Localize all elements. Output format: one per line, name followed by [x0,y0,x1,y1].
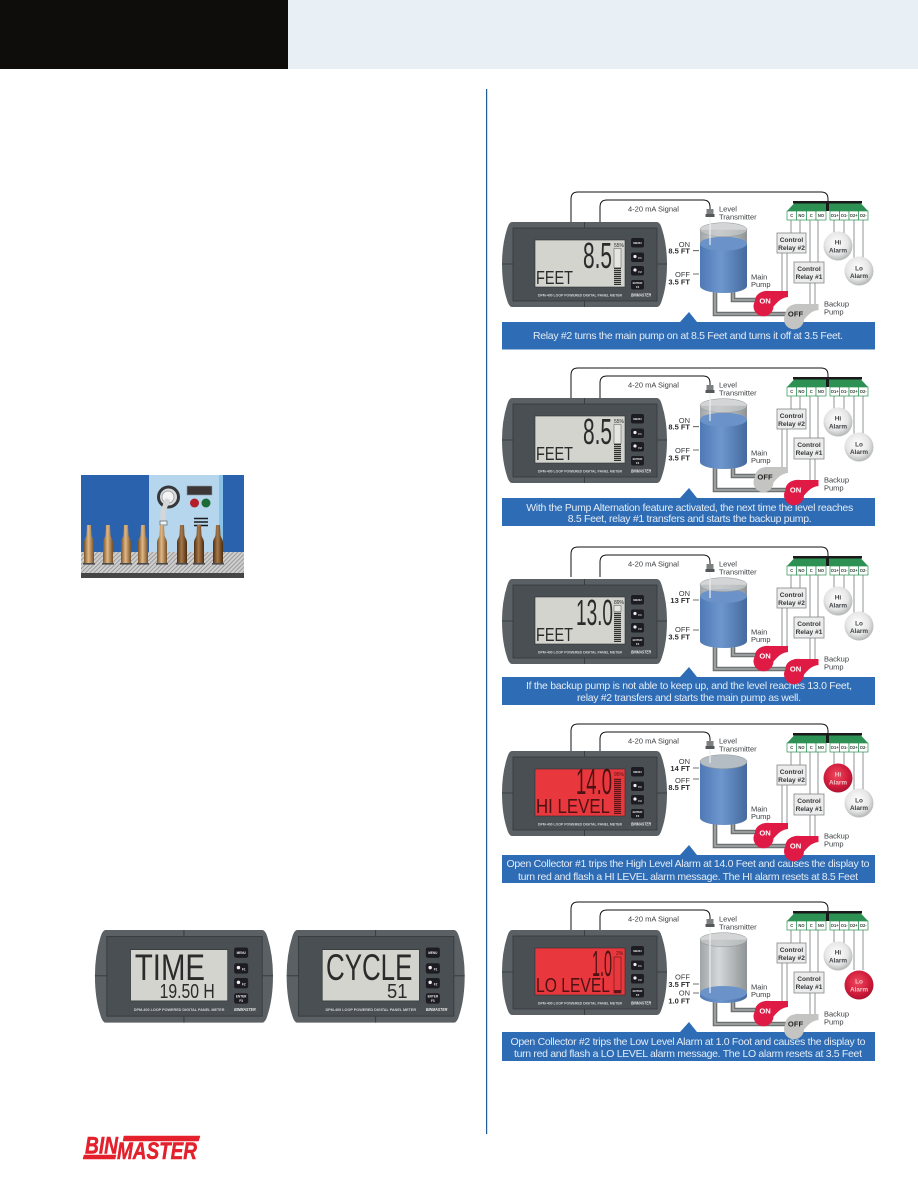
relay and terminal labels: C [790,923,793,928]
panel: low level alarm [502,902,875,1061]
signal and instrument labels: Level [719,560,737,568]
tank with water level [700,741,747,825]
relay and terminal labels: C [810,213,813,218]
relay and terminal labels: Relay #2 [778,421,805,428]
relay and terminal labels [778,213,867,281]
meter: 8.5 FEET: 55% [614,419,625,425]
meter: 14.0 HI LEVEL: MENU [633,770,642,774]
meter: TIME 1950 H display: MENU [237,951,246,955]
relay and terminal labels: O2+ [850,745,858,750]
signal and instrument labels [628,914,849,1026]
pump: backup off: OFF [788,1020,803,1029]
pump: main on [754,646,788,671]
lo alarm: Alarm [850,628,868,635]
caption banner: With the Pump Alternation feature activated, the next time the level reaches [526,502,853,514]
meter: TIME 1950 H display: DPM-400 LOOP POWERED DIGITAL PANEL METER [134,1008,225,1012]
level set points: 3.5 FT [668,980,690,989]
caption banner: Relay #2 turns the main pump on at 8.5 Feet and turns it off at 3.5 Feet. [533,330,843,342]
meter: 14.0 HI LEVEL: 95% [614,772,625,778]
relay and terminal labels: Control [797,621,821,628]
header: black title block [0,0,288,69]
meter: 1.0 LO LEVEL [502,930,667,1015]
relay and terminal labels: Control [780,237,803,244]
signal and instrument labels: Main [751,272,767,282]
lo alarm: Alarm [850,273,868,280]
level set points: ON [679,416,690,425]
signal and instrument labels: 4-20 mA Signal [628,380,679,390]
signal and instrument labels: Level [719,914,737,924]
signal and instrument labels: Pump [751,812,771,821]
pump: backup off [784,304,818,329]
level set points: OFF [675,446,690,455]
panel: backup cannot keep up [502,547,875,705]
hi alarm: Alarm [829,958,847,964]
meter: 13.0 FEET [502,579,667,664]
meter: TIME 1950 H display: TIME [135,947,205,988]
signal and instrument labels: Transmitter [719,922,757,932]
meter: 8.5 FEET: MENU [633,241,642,245]
relay and terminal labels: Relay #2 [778,777,805,784]
relay and terminal labels: Control [780,413,803,420]
meter: 13.0 FEET: MENU [633,598,642,602]
relay and terminal labels: Relay #2 [778,245,805,252]
meter: 1.0 LO LEVEL: 1.0 [592,943,612,984]
hi alarm [824,408,852,436]
signal and instrument labels: Main [751,448,767,458]
level set points [668,416,699,462]
meter: 8.5 FEET: MENU [633,417,642,421]
column divider line [486,89,487,1134]
relay and terminal labels: NO [798,923,805,928]
meter: 8.5 FEET: F3 [636,461,640,465]
meter: 13.0 FEET: F2 [638,627,642,631]
level set points: OFF [675,972,690,982]
meter: 14.0 HI LEVEL [502,751,667,836]
meter: 1.0 LO LEVEL: 2% [616,951,624,957]
meter: 1.0 LO LEVEL: DPM-400 LOOP POWERED DIGITAL PANEL METER [538,1001,623,1005]
signal and instrument labels: Transmitter [719,568,757,576]
relay and terminal labels [778,745,867,813]
relay and terminal labels: O1- [841,213,848,218]
panel: relay 2 main pump [502,192,875,350]
pump: backup on: ON [790,842,801,851]
relay and terminal labels: O1+ [831,389,839,394]
level set points: 3.5 FT [668,632,690,642]
relay and terminal labels: O2- [860,745,867,750]
relay and terminal labels: C [790,389,793,394]
hi alarm active: Alarm [829,780,847,786]
meter: 8.5 FEET [502,222,667,307]
meter: 13.0 FEET: 13.0 [576,592,613,633]
tank with water level [700,209,747,293]
pump: backup on [784,836,818,861]
pump: main off [754,467,788,492]
meter: 8.5 FEET: DPM-400 LOOP POWERED DIGITAL PANEL METER [538,293,623,297]
level set points: 8.5 FT [668,783,690,792]
meter: TIME 1950 H display: F3 [239,999,243,1003]
meter: 1.0 LO LEVEL: F2 [638,978,642,982]
signal and instrument labels: Transmitter [719,212,757,222]
signal and instrument labels [628,380,849,492]
signal and instrument labels: Main [751,804,767,814]
level set points: 3.5 FT [668,454,690,462]
signal and instrument labels: Level [719,736,737,746]
relay and terminal labels: O2+ [850,923,858,928]
relay and terminal labels: NO [798,745,805,750]
hi alarm [824,232,852,260]
hi alarm: Hi [835,416,841,422]
hi alarm: Hi [835,950,841,956]
level set points: ON [679,589,690,598]
pump: backup on [784,659,818,684]
lo alarm: Lo [855,266,863,272]
relay and terminal labels: NO [798,389,805,394]
level set points: 13 FT [670,596,690,605]
relay and terminal labels: NO [818,745,825,750]
level set points: ON [679,757,690,766]
signal and instrument labels: Backup [824,654,849,664]
relay and terminal labels: Control [780,592,803,599]
level set points [668,757,699,792]
signal and instrument labels: Pump [751,280,771,289]
pump: main on [754,291,788,316]
caption banner [502,845,875,883]
lo alarm: Lo [855,442,863,448]
meter: 1.0 LO LEVEL: MENU [633,949,642,953]
meter: 14.0 HI LEVEL: HI LEVEL [536,796,610,818]
signal and instrument labels: Main [751,982,767,992]
signal and instrument labels [628,204,849,316]
meter: TIME 1950 H display: F2 [242,983,246,987]
relay and terminal labels: Control [797,442,821,449]
signal and instrument labels: Pump [751,990,771,999]
meter: CYCLE 51 display: F2 [434,983,438,987]
hi alarm [824,942,852,970]
logo: BinMaster: MASTER [117,1138,198,1165]
meter: 8.5 FEET: F1 [638,256,642,260]
signal and instrument labels: Pump [824,662,844,672]
signal and instrument labels: Pump [824,308,844,316]
meter: TIME 1950 H display: BINMASTER [234,1007,256,1013]
meter: CYCLE 51 display: DPM-400 LOOP POWERED DIGITAL PANEL METER [325,1008,416,1012]
relay and terminal labels: C [790,213,793,218]
caption banner: relay #2 transfers and starts the main pump as well. [577,692,801,704]
signal and instrument labels: Backup [824,476,849,484]
lo alarm: Alarm [850,805,868,812]
meter: CYCLE 51 display [287,930,465,1023]
level set points: OFF [675,270,690,279]
meter: 14.0 HI LEVEL: 14.0 [576,761,612,802]
pump: main on: ON [759,829,771,838]
relay and terminal labels: C [790,568,793,573]
panel: high level alarm [502,724,875,883]
lo alarm [844,788,874,818]
pump: backup on [784,480,818,505]
tank with water level [700,385,747,469]
lo alarm active: Alarm [850,986,868,994]
lo alarm active [844,970,874,1000]
relay and terminal labels: O2- [860,568,867,573]
relay and terminal labels: NO [818,213,825,218]
meter: 1.0 LO LEVEL: ENTER [633,989,643,993]
relay and terminal labels [778,389,867,457]
caption banner [502,1022,875,1061]
lo alarm [844,432,874,462]
signal and instrument labels: Pump [824,484,844,492]
hi alarm: Alarm [829,424,847,430]
relay and terminal labels: C [810,745,813,750]
meter: CYCLE 51 display: ENTER [428,995,439,999]
pump: backup on: ON [790,665,801,674]
meter: 14.0 HI LEVEL: DPM-400 LOOP POWERED DIGITAL PANEL METER [538,822,623,826]
pump: backup off [784,1014,818,1039]
relay and terminal labels [778,923,867,991]
meter: 8.5 FEET: BINMASTER [631,292,652,298]
relay and terminal labels: Control [797,798,821,805]
meter: 8.5 FEET: F2 [638,270,642,274]
pump: backup on: ON [790,486,801,495]
relay and terminal labels: O1- [841,923,848,928]
level set points: 8.5 FT [668,246,690,256]
relay and terminal labels: O2- [860,389,867,394]
meter: TIME 1950 H display [95,930,273,1023]
level set points [668,589,699,642]
relay and terminal labels: O1+ [831,923,839,928]
signal and instrument labels: Transmitter [719,388,757,398]
pump: main on: ON [759,1007,771,1016]
meter: 8.5 FEET [502,398,667,483]
relay and terminal labels: Relay #1 [796,629,823,636]
lo alarm [844,256,874,286]
meter: 8.5 FEET: ENTER [633,281,643,285]
caption banner: 8.5 Feet, relay #1 transfers and starts the backup pump. [568,513,812,525]
meter: 8.5 FEET: BINMASTER [631,468,652,474]
signal and instrument labels [628,736,849,848]
relay and terminal labels: NO [818,568,825,573]
relay and terminal labels: O1+ [831,213,839,218]
pump: backup off: OFF [788,310,803,319]
meter: CYCLE 51 display: F3 [431,999,435,1003]
tank with water level [700,564,747,648]
meter: 14.0 HI LEVEL: F1 [638,785,642,789]
meter: 1.0 LO LEVEL: BINMASTER [631,1000,652,1006]
signal and instrument labels: 4-20 mA Signal [628,560,679,568]
meter: CYCLE 51 display: BINMASTER [426,1007,448,1013]
relay and terminal labels: O1+ [831,745,839,750]
hi alarm: Hi [835,240,841,246]
meter: 13.0 FEET: ENTER [633,638,643,642]
relay and terminal labels: O2+ [850,389,858,394]
relay and terminal labels: C [810,389,813,394]
meter: 13.0 FEET: 89% [614,600,625,606]
meter: 13.0 FEET: BINMASTER [631,650,652,654]
relay and terminal labels: O2- [860,923,867,928]
relay and terminal labels: O2+ [850,568,858,573]
signal and instrument labels: Transmitter [719,744,757,754]
panel: pump alternation backup pump [502,368,875,526]
level set points: OFF [675,625,690,634]
logo: BinMaster [83,1132,200,1165]
caption banner: turn red and flash a LO LEVEL alarm message. The LO alarm resets at 3.5 Feet [514,1048,862,1060]
meter: TIME 1950 H display: F1 [242,967,246,971]
illustration: bottling line with level sensor [81,475,244,578]
level set points [668,972,699,1006]
pump: main on: ON [759,297,771,306]
meter: 8.5 FEET: ENTER [633,457,643,461]
caption banner: If the backup pump is not able to keep up, and the level reaches 13.0 Feet, [526,680,852,692]
relay and terminal labels: C [810,568,813,573]
meter: 1.0 LO LEVEL: F3 [636,993,640,997]
meter: CYCLE 51 display: 51 [387,980,407,1003]
meter: TIME 1950 H display: ENTER [236,995,247,999]
relay and terminal labels: C [810,923,813,928]
meter: 14.0 HI LEVEL: BINMASTER [631,822,652,826]
hi alarm active: Hi [835,772,841,778]
signal and instrument labels: Pump [751,635,771,644]
meter: 13.0 FEET: DPM-400 LOOP POWERED DIGITAL PANEL METER [538,650,623,654]
level set points: ON [679,988,690,998]
hi alarm: Hi [835,594,841,602]
relay and terminal labels: O1+ [831,568,839,573]
level set points: 3.5 FT [668,278,690,286]
meter: 13.0 FEET: F3 [636,642,640,646]
lo alarm active: Lo [855,978,863,986]
relay and terminal labels: O1- [841,568,848,573]
relay and terminal labels: Relay #1 [796,450,823,457]
meter: 8.5 FEET: DPM-400 LOOP POWERED DIGITAL PANEL METER [538,469,623,473]
level set points: 1.0 FT [668,996,690,1006]
relay and terminal labels: Relay #2 [778,600,805,607]
caption banner: turn red and flash a HI LEVEL alarm message. The HI alarm resets at 8.5 Feet [518,871,858,883]
signal and instrument labels: Main [751,628,767,636]
relay and terminal labels: Relay #1 [796,984,823,991]
pump: main on [754,823,788,848]
relay and terminal labels: Relay #1 [796,274,823,281]
relay and terminal labels: O1- [841,389,848,394]
meter: CYCLE 51 display: MENU [428,951,438,955]
hi alarm active [824,764,852,792]
signal and instrument labels: Level [719,204,737,214]
relay and terminal labels: O1- [841,745,848,750]
relay and terminal labels: O2+ [850,213,858,218]
signal and instrument labels: 4-20 mA Signal [628,736,679,746]
hi alarm: Alarm [829,248,847,254]
caption banner [502,312,875,350]
relay and terminal labels: Control [797,266,821,273]
signal and instrument labels: 4-20 mA Signal [628,204,679,214]
logo: BinMaster: BIN [85,1132,119,1160]
relay and terminal labels: Control [780,947,803,954]
meter: 8.5 FEET: 8.5 [583,411,612,452]
meter: 14.0 HI LEVEL: F3 [636,814,640,818]
caption banner [502,667,875,705]
meter: 8.5 FEET: 55% [614,243,625,249]
meter: TIME 1950 H display: 19.50 H [160,980,215,1003]
signal and instrument labels: 4-20 mA Signal [628,914,679,924]
level set points: 8.5 FT [668,422,690,432]
signal and instrument labels [628,560,849,672]
level set points: 14 FT [670,764,690,773]
relay and terminal labels: Relay #1 [796,806,823,813]
caption banner: Open Collector #2 trips the Low Level Alarm at 1.0 Foot and causes the display to [510,1036,866,1048]
lo alarm [844,612,874,640]
meter: 8.5 FEET: FEET [536,268,573,288]
relay and terminal labels [778,568,867,636]
hi alarm [824,586,852,616]
relay and terminal labels: Control [797,976,821,983]
meter: 13.0 FEET: FEET [536,625,573,645]
pump: main off: OFF [757,473,773,482]
relay and terminal labels: O2- [860,213,867,218]
meter: 8.5 FEET: F1 [638,432,642,436]
level set points: OFF [675,776,690,785]
relay and terminal labels: NO [798,213,805,218]
relay and terminal labels: Control [780,769,803,776]
hi alarm: Alarm [829,602,847,610]
relay and terminal labels: NO [818,389,825,394]
meter: CYCLE 51 display: CYCLE [326,947,412,988]
signal and instrument labels: Pump [751,456,771,465]
meter: 8.5 FEET: FEET [536,444,573,464]
relay and terminal labels: Relay #2 [778,955,805,962]
pump: main on: ON [759,652,771,661]
relay and terminal labels: C [790,745,793,750]
meter: 8.5 FEET: F2 [638,446,642,450]
pump: main on [754,1001,788,1026]
meter: 14.0 HI LEVEL: F2 [638,799,642,803]
meter: 13.0 FEET: F1 [638,613,642,617]
tank with water level [700,919,747,1003]
caption banner [502,488,875,526]
header: light blue band [288,0,918,69]
relay and terminal labels: NO [798,568,805,573]
signal and instrument labels: Backup [824,832,849,840]
lo alarm: Lo [855,798,863,804]
signal and instrument labels: Backup [824,1010,849,1018]
level set points [668,240,699,286]
signal and instrument labels: Backup [824,300,849,308]
meter: CYCLE 51 display: F1 [434,967,438,971]
meter: 14.0 HI LEVEL: ENTER [633,810,643,814]
signal and instrument labels: Level [719,380,737,390]
lo alarm: Alarm [850,449,868,456]
meter: 1.0 LO LEVEL: LO LEVEL [536,975,610,997]
meter: 8.5 FEET: F3 [636,285,640,289]
relay and terminal labels: NO [818,923,825,928]
level set points: ON [679,240,690,249]
meter: 1.0 LO LEVEL: F1 [638,964,642,968]
signal and instrument labels: Pump [824,1018,844,1026]
meter: 8.5 FEET: 8.5 [583,235,612,276]
caption banner: Open Collector #1 trips the High Level Alarm at 14.0 Feet and causes the display to [506,858,870,870]
lo alarm: Lo [855,620,863,628]
signal and instrument labels: Pump [824,840,844,848]
